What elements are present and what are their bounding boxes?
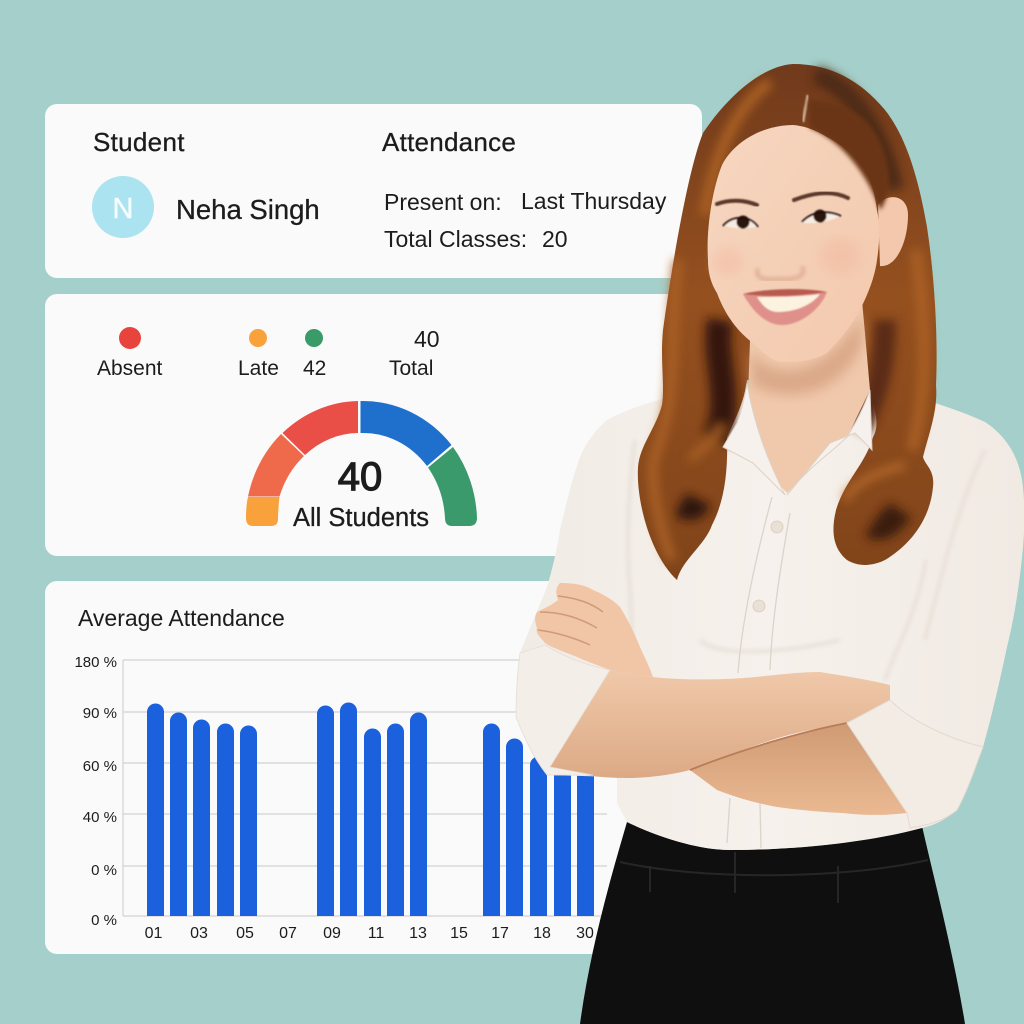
right sleeve cuff [847,700,983,828]
x axis labels: 05 [236,925,254,942]
arm crease [690,723,847,770]
legend: total 40: Total [389,357,433,380]
x axis labels: 01 [145,925,162,942]
person: smiling woman with crossed arms [516,64,1024,1024]
shirt [516,383,1024,850]
heading: student: Student [93,127,185,157]
panel: average attendance [45,581,702,954]
legend: present 42: 42 [303,357,326,380]
face [708,125,879,362]
collar left [723,383,785,495]
cheeks [713,238,860,276]
panel: student attendance [45,104,702,278]
eyes [723,210,841,228]
gauge value: 40 [338,455,382,499]
bars [147,702,594,916]
student name: Neha Singh [176,194,320,225]
ear [878,197,908,266]
legend: total 40: 40 [414,326,440,352]
present on: Present on: [384,189,502,215]
neck and chest [748,300,870,493]
x axis labels [145,925,594,942]
x axis labels: 15 [450,925,468,942]
classes value: 20 [542,226,568,252]
last thursday: Last Thursday [521,188,667,214]
y axis labels: 0 % [91,862,117,879]
x axis labels: 09 [323,925,341,942]
y axis labels: 180 % [74,654,117,671]
hand [535,583,653,677]
y axis labels: 60 % [83,758,117,775]
y axis labels: 0 % [91,912,117,929]
legend: absent: Absent [97,357,163,380]
x axis labels: 17 [491,925,509,942]
chart title: Average Attendance [78,605,285,631]
hair part [803,95,808,122]
hair [638,64,937,580]
legend: absent [97,327,163,380]
shirt folds [628,440,985,680]
panel: attendance summary [45,294,702,556]
placket [727,497,790,848]
trousers [580,822,965,1024]
legend: present 42 [303,329,326,380]
icon: student avatar: N [113,193,133,225]
nose [757,266,803,279]
smile [743,289,827,325]
buttons [753,521,783,612]
neck shadow [750,315,862,395]
x axis labels: 30 [576,925,594,942]
x axis labels: 03 [190,925,208,942]
legend: late [238,329,279,380]
heading: attendance: Attendance [382,127,516,157]
legend: total 40 [389,326,440,380]
bar chart [74,654,607,942]
collar right [787,390,872,495]
icon: student avatar [92,176,154,238]
gauge label: All Students [293,504,429,532]
total classes: Total Classes: [384,226,527,252]
x axis labels: 11 [368,925,384,942]
y axis labels: 40 % [83,809,117,826]
x axis labels: 18 [533,925,551,942]
left sleeve cuff [516,645,610,775]
legend: late: Late [238,357,279,380]
hair front right [808,100,888,210]
hair shading [653,75,924,560]
upper forearm [550,670,890,778]
brows [717,193,848,205]
y axis labels [74,654,117,929]
x axis labels: 07 [279,925,297,942]
x axis labels: 13 [409,925,427,942]
lower forearm [690,723,907,815]
gauge chart [246,401,477,532]
y axis labels: 90 % [83,705,117,722]
